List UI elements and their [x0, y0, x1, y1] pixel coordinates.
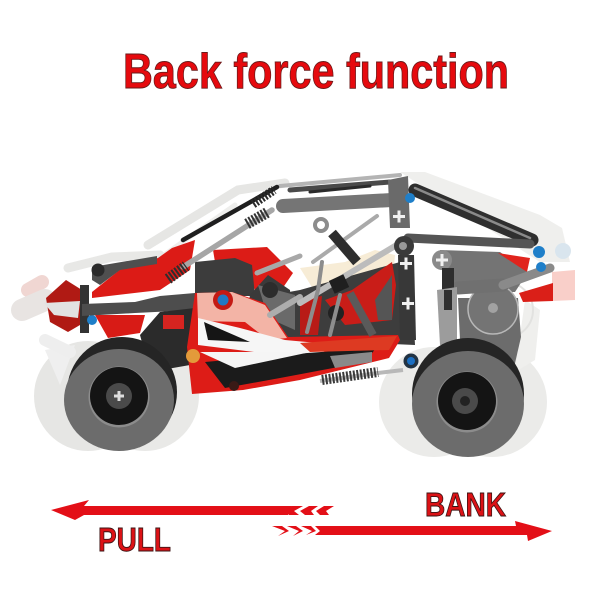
- front cross bar: [82, 293, 195, 316]
- roll cage tubes: [183, 175, 550, 335]
- rear wheel: [412, 338, 524, 457]
- side panel black and white stripes: [198, 318, 340, 362]
- arrow: pull left: [51, 500, 334, 520]
- front shock springs: [168, 190, 274, 279]
- label: PULL: PULL: [98, 521, 171, 558]
- rear gearbox: [440, 250, 553, 372]
- car: [44, 175, 553, 457]
- interior dark chassis: [245, 262, 415, 345]
- arrow: bank right: [272, 521, 552, 541]
- front wheel: [64, 337, 177, 451]
- ghost front wheels: [34, 341, 199, 451]
- label: BANK: BANK: [425, 486, 506, 523]
- red engine cover: [213, 247, 293, 292]
- front suspension: [140, 308, 195, 372]
- ghost rear wheels: [379, 347, 547, 457]
- side panel: [186, 290, 400, 394]
- front nose: [44, 264, 104, 333]
- title: Back force function: [123, 45, 509, 99]
- engine dark mechanics: [195, 258, 295, 330]
- ghost motion blur of car: [22, 172, 575, 457]
- bank arrow chevrons: [272, 526, 316, 536]
- centre shock absorbers: [315, 219, 373, 335]
- rear red fenders: [498, 253, 530, 272]
- red hood: [92, 240, 195, 298]
- front under red: [95, 315, 145, 338]
- hood top bar: [92, 256, 157, 285]
- blue rear bolt: [404, 354, 418, 368]
- pull arrow chevrons: [286, 506, 334, 515]
- rear pillars with cross pins: [388, 176, 546, 345]
- cockpit cream glow: [300, 250, 395, 300]
- ghost rear end: [400, 172, 575, 372]
- side spring: [320, 370, 403, 381]
- ghost front end: [22, 183, 285, 352]
